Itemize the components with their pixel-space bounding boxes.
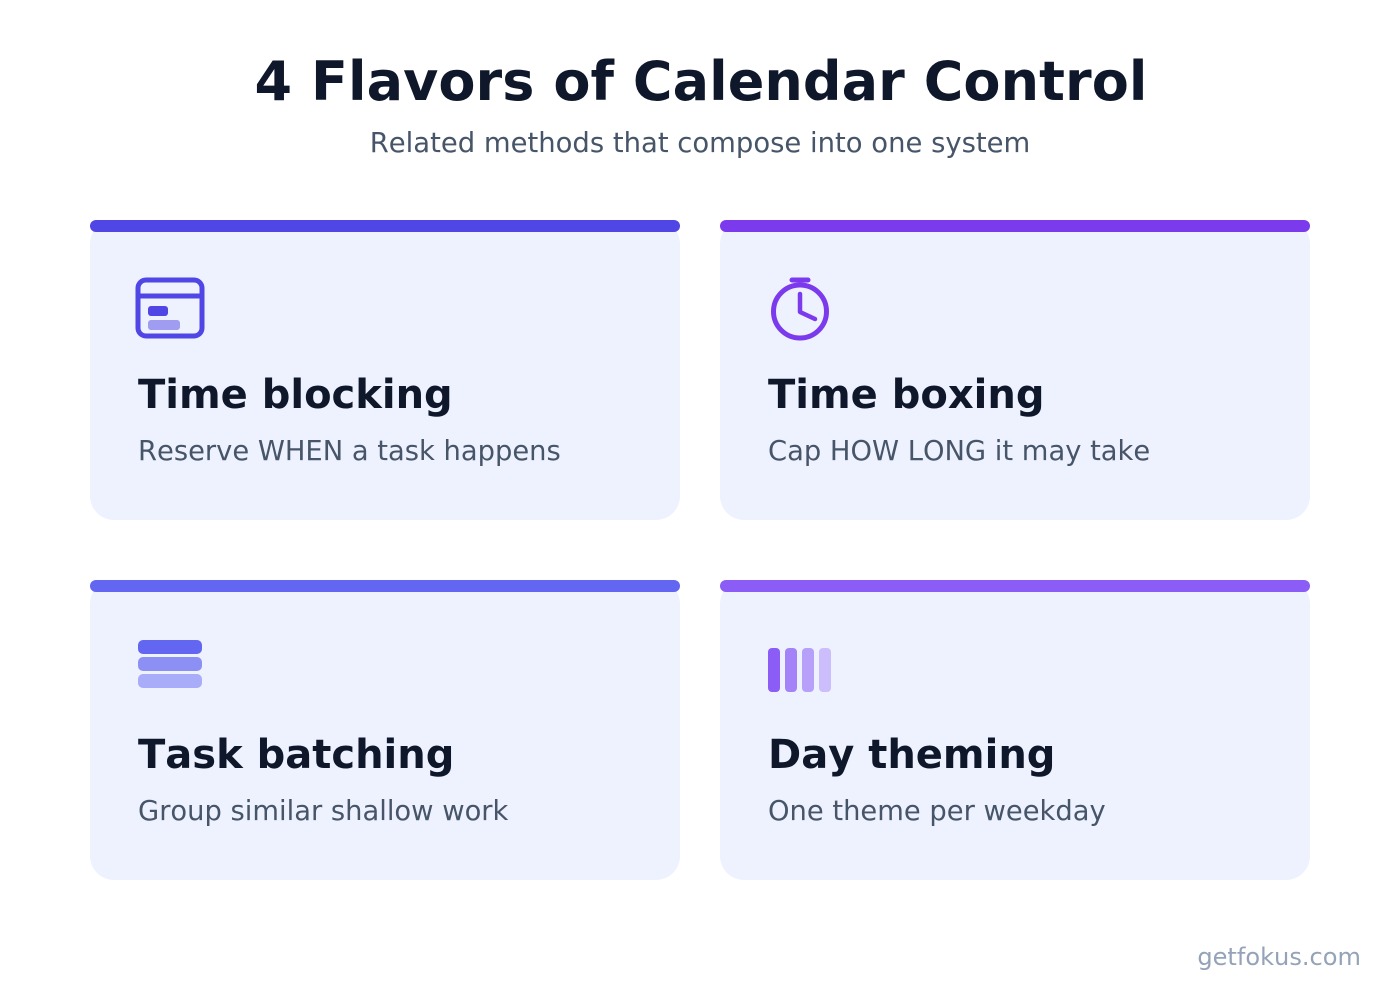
heading: Task batching [138, 732, 454, 778]
heading: Time blocking [138, 372, 453, 418]
icon: stacked bars [138, 640, 202, 688]
panel: task batching [90, 580, 680, 880]
panel: time boxing [720, 220, 1310, 520]
accent bar [720, 580, 1310, 592]
description: Reserve WHEN a task happens [138, 436, 561, 467]
accent bar [720, 220, 1310, 232]
accent bar [90, 220, 680, 232]
accent bar [90, 580, 680, 592]
subtitle: Related methods that compose into one system [370, 128, 1030, 159]
description: Cap HOW LONG it may take [768, 436, 1150, 467]
description: One theme per weekday [768, 796, 1106, 827]
panel: day theming [720, 580, 1310, 880]
title: 4 Flavors of Calendar Control [255, 50, 1147, 113]
icon: stopwatch [771, 278, 829, 340]
heading: Day theming [768, 732, 1055, 778]
description: Group similar shallow work [138, 796, 508, 827]
icon: calendar block [136, 278, 204, 338]
panel: time blocking [90, 220, 680, 520]
icon: weekday columns [768, 648, 831, 692]
heading: Time boxing [768, 372, 1044, 418]
footer: source credit: getfokus.com [1197, 943, 1361, 971]
